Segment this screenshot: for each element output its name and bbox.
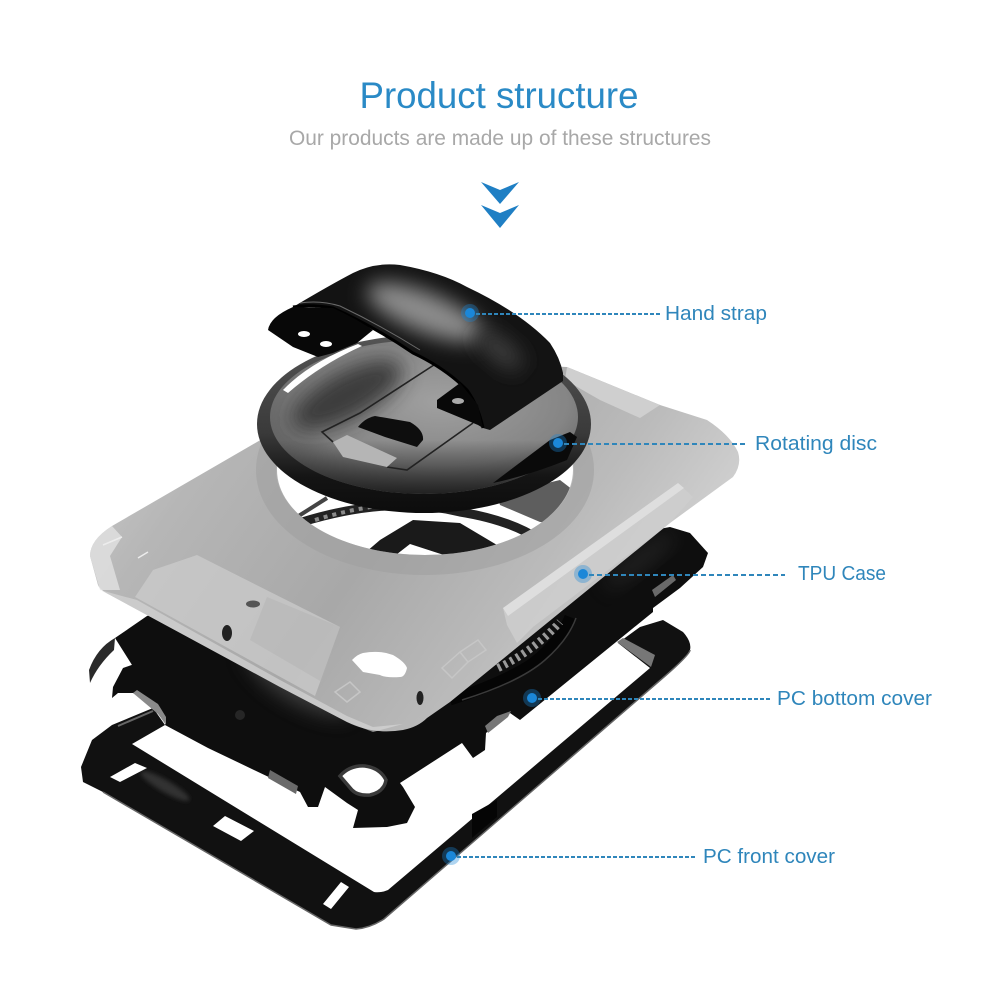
disc top window [283,344,362,393]
front cover inner gray strip [617,638,655,667]
bottom cover sheen [237,526,680,729]
callout: Rotating disc: Rotating disc [755,433,877,455]
front cover cut-outs [110,763,349,909]
callout: PC bottom cover [523,688,932,710]
disc shadow [283,346,542,494]
TPU left corner highlight [90,526,122,590]
TPU upper right corner [565,367,660,418]
strap left tab [268,307,373,357]
bottom cover speaker hole [340,766,386,795]
TPU left corner notches [103,537,148,558]
TPU ring around opening [266,375,584,565]
callout: PC front cover: PC front cover [703,846,835,868]
front cover top-left slot [118,711,153,726]
title: Product structure [360,75,638,116]
product: PC front cover [81,620,690,929]
bottom cover side buttons [485,711,511,733]
TPU lower-left reinforced band [135,555,340,696]
icon: double chevron arrow [481,182,519,228]
disc right notch [493,432,577,483]
product: rotating disc [257,335,591,513]
front cover side button [472,800,497,838]
rotating wheel visible beneath case [450,617,570,700]
callout: TPU Case: TPU Case [798,563,886,585]
strap tab holes [298,331,310,337]
callout: PC front cover [442,846,835,868]
TPU button outlines [335,640,486,702]
front cover sheen [138,767,192,805]
strap highlights [360,270,529,377]
product: PC bottom cover [89,526,708,828]
TPU holes [222,625,232,641]
TPU camera opening [352,652,407,677]
bottom cover left clip [89,638,115,683]
callout: PC bottom cover: PC bottom cover [777,688,932,710]
callout: TPU Case [574,563,886,585]
callout: Rotating disc [549,433,877,455]
subtitle: Our products are made up of these structures [289,127,711,150]
strap inner edge [293,306,483,428]
disc plate window [358,416,423,447]
callout: Hand strap: Hand strap [665,303,767,325]
TPU right side strip [503,483,693,643]
callout: Hand strap [461,303,767,325]
product: hand strap [268,264,563,430]
product: inner wheel and bracket seen through the ring [297,480,573,559]
product: TPU case [90,360,739,732]
strap right tab [437,383,483,428]
disc plate outline [322,363,473,470]
disc plate tab [333,435,397,467]
